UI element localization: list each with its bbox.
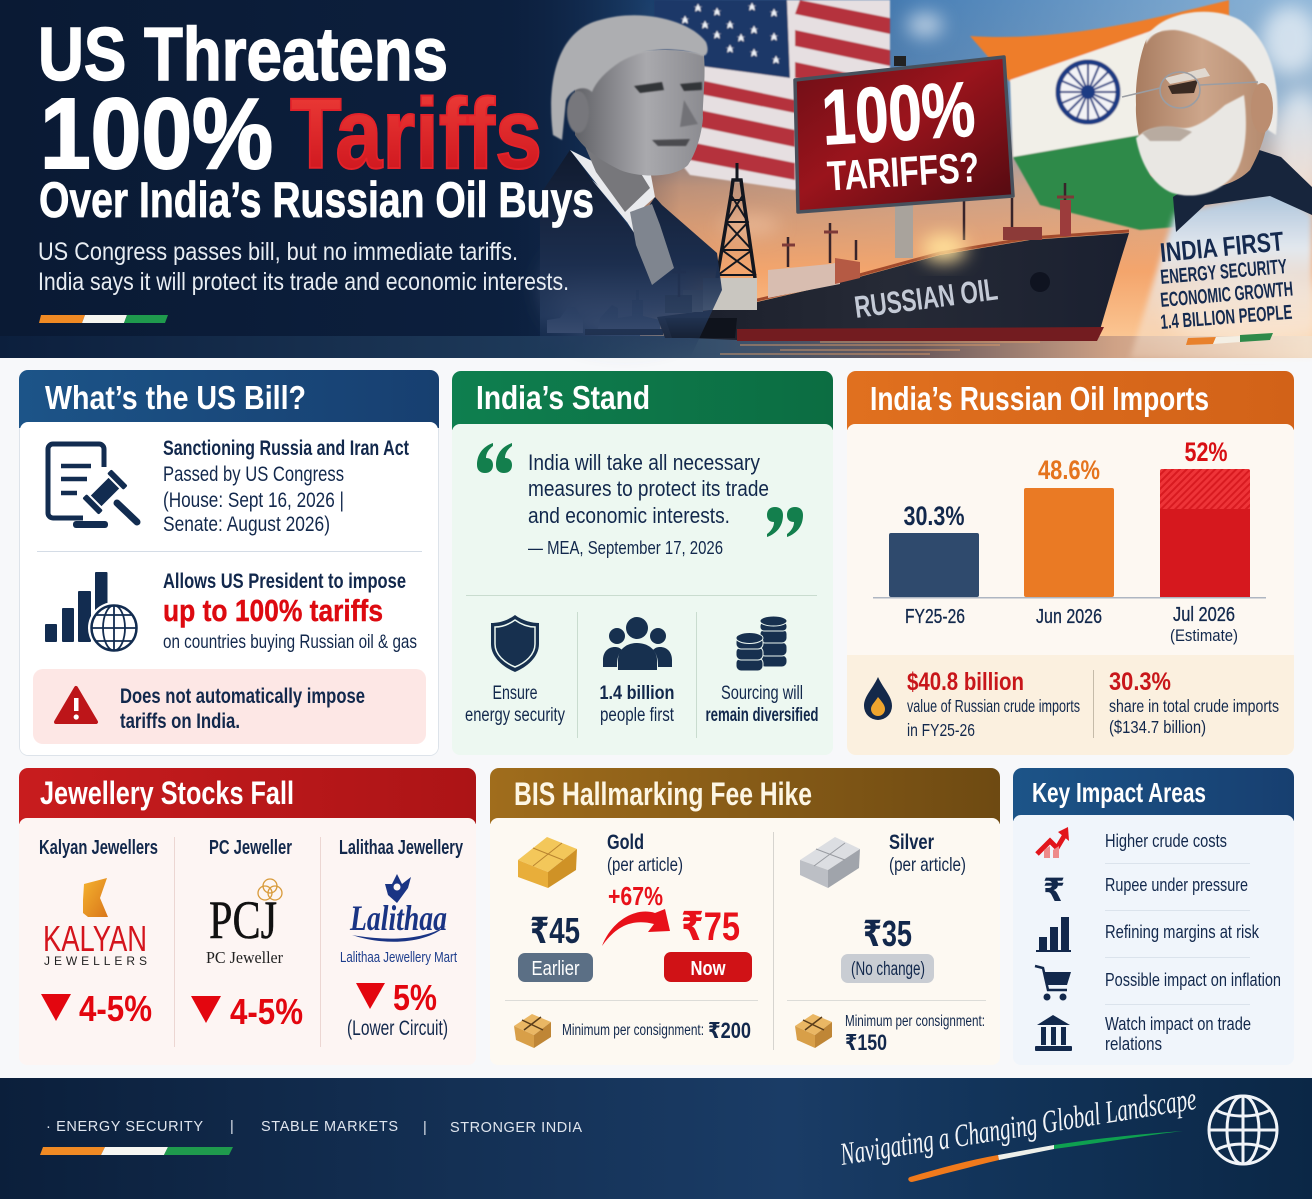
Modi figure xyxy=(1122,12,1312,358)
Trump figure xyxy=(540,15,722,358)
panel: India's Stand xyxy=(452,371,833,755)
silver fee: Minimum per consignment: xyxy=(845,1013,985,1030)
icon: warning xyxy=(56,688,96,722)
panel header xyxy=(847,371,1294,430)
gold fee: (per article) xyxy=(607,854,683,876)
row: trade: relations xyxy=(1105,1033,1162,1054)
row: rupee: Rupee under pressure xyxy=(1105,874,1248,895)
panel: Key Impact Areas xyxy=(1013,768,1294,1065)
heading: Key Impact Areas xyxy=(1032,777,1206,808)
stock: PC Jeweller: 4-5% xyxy=(230,991,303,1032)
bar chart: 52% xyxy=(1184,437,1228,467)
sign: 100% tariffs xyxy=(795,56,1013,258)
tricolor bar xyxy=(40,1147,233,1155)
silver fee: ₹150 xyxy=(845,1030,887,1055)
act text: Passed by US Congress xyxy=(163,463,344,486)
subtitle xyxy=(38,238,569,296)
stock: Kalyan: JEWELLERS xyxy=(44,954,147,968)
pill: earlier xyxy=(518,953,593,982)
icon: gold bar xyxy=(518,837,577,888)
gold fee: ₹200 xyxy=(708,1018,751,1043)
stats strip: in FY25-26 xyxy=(907,720,975,740)
title: Over India’s Russian Oil Buys xyxy=(39,172,594,228)
icon: bars and globe xyxy=(45,572,140,654)
arrow xyxy=(602,909,670,946)
panel header xyxy=(452,371,833,430)
title xyxy=(38,12,594,228)
icon: small box xyxy=(514,1014,551,1048)
ship label: RUSSIAN OIL xyxy=(852,271,1000,325)
sun glow xyxy=(922,234,966,262)
icon: silver bar xyxy=(800,837,860,888)
pill: no change: (No change) xyxy=(851,959,925,980)
row: trade: Watch impact on trade xyxy=(1105,1013,1251,1034)
tariff text xyxy=(163,570,417,653)
stats strip xyxy=(847,655,1294,755)
callout: Does not automatically impose xyxy=(120,685,365,708)
stock: Kalyan: 4-5% xyxy=(79,988,152,1029)
bar chart: 30.3% xyxy=(904,501,964,531)
stock: Kalyan xyxy=(39,837,158,1029)
stats strip: 30.3% xyxy=(1109,668,1171,696)
Indian flag xyxy=(970,0,1229,230)
row: margins: Refining margins at risk xyxy=(1105,921,1260,942)
pill: now xyxy=(664,952,752,982)
hero banner xyxy=(0,0,1312,358)
gold fee: ₹45 xyxy=(530,910,580,951)
tariff text: Allows US President to impose xyxy=(163,570,406,593)
subtitle: US Congress passes bill, but no immediate tariffs. xyxy=(38,238,518,266)
stats strip: value of Russian crude imports xyxy=(907,696,1080,716)
bar chart xyxy=(873,437,1266,645)
icon: closing quote xyxy=(767,507,803,537)
icon: opening quote xyxy=(477,443,512,473)
act text: Sanctioning Russia and Iran Act xyxy=(163,437,409,460)
panel header xyxy=(490,768,1000,824)
stock: Kalyan: Kalyan Jewellers xyxy=(39,837,158,859)
stock: PC Jeweller: PCJ xyxy=(209,890,277,950)
icon: small box xyxy=(795,1014,832,1048)
footer values: STABLE MARKETS xyxy=(261,1119,398,1135)
panel header xyxy=(1013,768,1294,821)
callout: tariffs on India. xyxy=(120,710,240,733)
item: 1.4 billion people: 1.4 billion xyxy=(600,682,674,704)
quote: measures to protect its trade xyxy=(528,476,769,501)
item: diversified sourcing: Sourcing will xyxy=(721,682,803,704)
sign: 100% tariffs: TARIFFS? xyxy=(826,143,980,200)
panel header xyxy=(19,370,439,428)
heading: BIS Hallmarking Fee Hike xyxy=(514,776,812,812)
panel header xyxy=(19,768,476,824)
silver fee: (per article) xyxy=(889,854,966,876)
stock: PC Jeweller: PC Jeweller xyxy=(209,837,292,859)
footer values: | xyxy=(423,1120,427,1136)
tagline xyxy=(837,1080,1199,1182)
stock: Lalithaa: Lalithaa Jewellery Mart xyxy=(340,949,458,966)
panel: India's Russian Oil Imports xyxy=(847,371,1294,755)
quote: and economic interests. xyxy=(528,503,730,528)
footer values: | xyxy=(230,1119,234,1135)
clouds xyxy=(720,6,1312,345)
item: 1.4 billion people xyxy=(600,617,674,726)
act text xyxy=(163,437,409,536)
row: inflation xyxy=(1035,966,1281,1000)
row: rupee: ₹ xyxy=(1043,872,1065,908)
stock: Lalithaa: Lalithaa xyxy=(349,898,447,938)
bar chart: 48.6% xyxy=(1038,455,1100,485)
item: 1.4 billion people: people first xyxy=(600,704,674,726)
stock: Lalithaa: 5% xyxy=(393,977,437,1018)
stats strip: $40.8 billion xyxy=(907,668,1024,696)
stock: PC Jeweller: PC Jeweller xyxy=(206,948,283,967)
silver fee: ₹35 xyxy=(863,913,912,954)
footer xyxy=(0,1078,1312,1199)
row: trade xyxy=(1035,1013,1251,1054)
title: US Threatens xyxy=(38,12,448,96)
gold fee xyxy=(505,831,758,1048)
row: crude costs: Higher crude costs xyxy=(1105,830,1227,851)
quote: — MEA, September 17, 2026 xyxy=(528,537,723,558)
stock: Lalithaa: Lalithaa Jewellery xyxy=(339,837,464,859)
row: margins xyxy=(1036,917,1260,952)
tricolor bar xyxy=(39,315,168,323)
item: energy security: Ensure xyxy=(492,682,538,704)
gold fee: Minimum per consignment: xyxy=(562,1022,704,1039)
panel: Jewellery Stocks Fall xyxy=(19,768,476,1065)
tariff text: up to 100% tariffs xyxy=(163,593,383,628)
gold fee: Gold xyxy=(607,831,644,854)
bar chart: (Estimate) xyxy=(1170,626,1238,645)
oil rig xyxy=(716,163,756,278)
gold fee: ₹75 xyxy=(681,905,740,949)
act text: Senate: August 2026) xyxy=(163,513,330,536)
gold fee: +67% xyxy=(608,881,663,911)
act text: (House: Sept 16, 2026 | xyxy=(163,489,344,512)
heading: India’s Russian Oil Imports xyxy=(870,380,1209,417)
silver fee xyxy=(787,831,986,1055)
tariff text: on countries buying Russian oil & gas xyxy=(163,631,417,653)
item: diversified sourcing xyxy=(706,616,818,726)
item: energy security: energy security xyxy=(465,704,565,726)
heading: What’s the US Bill? xyxy=(45,379,306,416)
title: 100% xyxy=(40,78,273,190)
stats strip: ($134.7 billion) xyxy=(1109,717,1206,737)
icon: globe xyxy=(1209,1096,1277,1164)
bar chart: Jul 2026 xyxy=(1173,604,1235,626)
horizon haze xyxy=(550,245,700,335)
stock: PC Jeweller xyxy=(191,837,303,1032)
US flag xyxy=(654,0,890,190)
footer values xyxy=(46,1119,582,1136)
heading: India’s Stand xyxy=(476,379,650,416)
heading: Jewellery Stocks Fall xyxy=(40,775,294,811)
row: rupee xyxy=(1043,872,1248,908)
tanker ship xyxy=(657,183,1129,341)
row: crude costs xyxy=(1037,827,1227,858)
sign: 100% tariffs: 100% xyxy=(819,64,977,162)
stock: Kalyan: KALYAN xyxy=(43,918,147,959)
callout xyxy=(33,669,426,744)
pill: earlier: Earlier xyxy=(532,958,580,980)
panel: BIS Hallmarking Fee Hike xyxy=(490,768,1000,1065)
footer values: · ENERGY SECURITY xyxy=(46,1119,203,1135)
water xyxy=(0,336,1312,358)
title: Tariffs xyxy=(290,78,542,190)
stock: Lalithaa: (Lower Circuit) xyxy=(347,1017,448,1040)
silver fee: Silver xyxy=(889,831,934,854)
pill: no change xyxy=(841,954,934,983)
pill: now: Now xyxy=(690,958,726,980)
quote xyxy=(477,443,803,558)
icon: oil drop xyxy=(864,677,892,720)
panel: What's the US Bill xyxy=(19,370,439,756)
India First tagline xyxy=(1159,226,1294,334)
item: diversified sourcing: remain diversified xyxy=(706,704,818,726)
small tricolor xyxy=(1186,333,1273,345)
skyline xyxy=(547,290,663,335)
bar chart: Jun 2026 xyxy=(1036,606,1102,628)
item: energy security xyxy=(465,615,565,726)
footer values: STRONGER INDIA xyxy=(450,1120,582,1136)
ship superstructure xyxy=(665,183,1074,313)
subtitle: India says it will protect its trade and economic interests. xyxy=(38,268,569,296)
quote: India will take all necessary xyxy=(528,450,760,475)
left dark overlay xyxy=(0,0,680,358)
bar chart: FY25-26 xyxy=(905,606,965,628)
icon: document and gavel xyxy=(48,444,137,528)
stock: Lalithaa xyxy=(339,837,464,1040)
